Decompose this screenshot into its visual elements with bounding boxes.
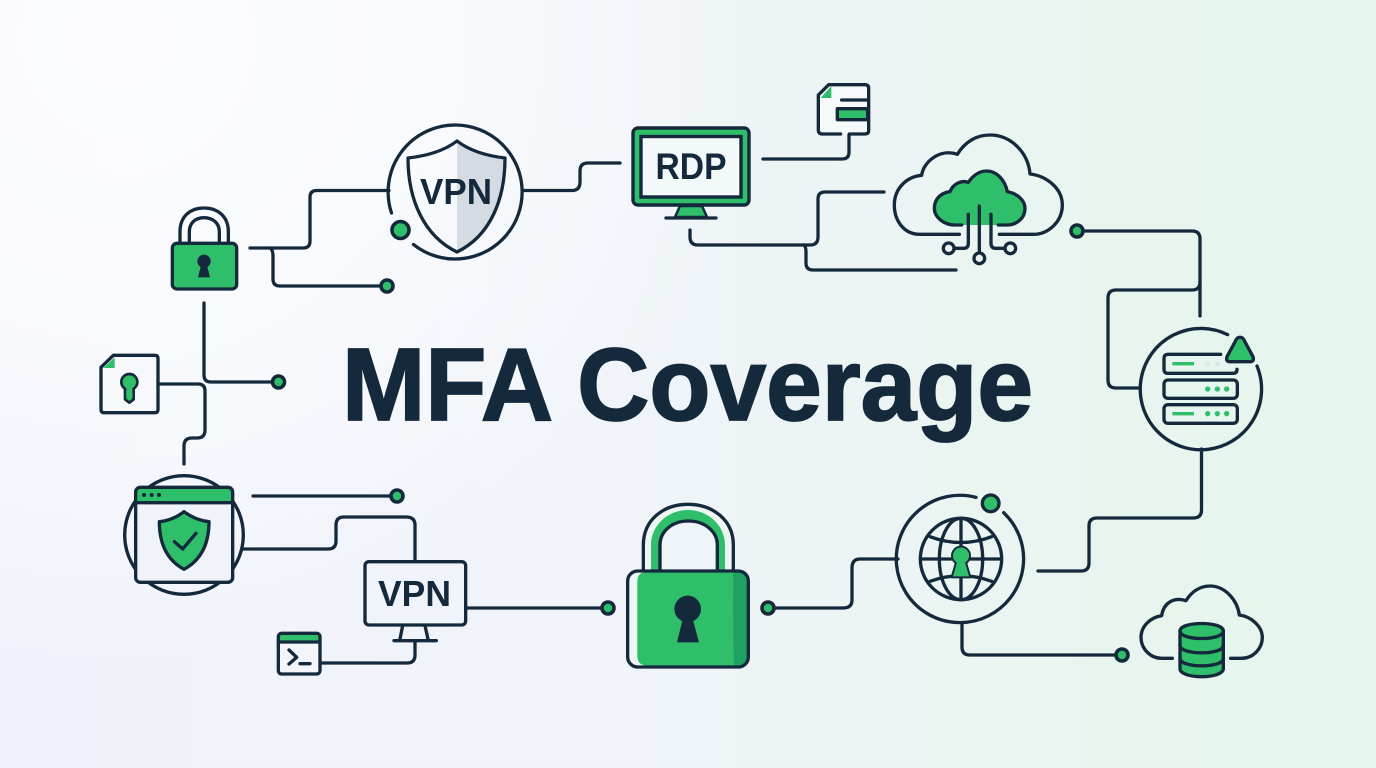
connector: VPN shield to RDP monitor: [524, 163, 620, 190]
connector: browser shield to VPN monitor: [243, 517, 415, 561]
connector: globe to cloud database: [962, 623, 1128, 661]
icon: large padlock: [628, 504, 748, 667]
connector: RDP monitor to document: [763, 134, 849, 159]
icon: RDP monitor: [633, 128, 749, 218]
icon: VPN monitor: [365, 562, 466, 641]
connector: browser shield to node: [253, 490, 403, 502]
icon: key file: [101, 355, 158, 413]
connector: VPN monitor to large lock: [467, 602, 614, 614]
icon: small padlock: [172, 208, 237, 289]
connector: small lock to VPN shield: [250, 190, 393, 292]
icon: terminal: [278, 633, 320, 674]
icon: globe with keyhole: [896, 495, 1024, 623]
icon: document: [818, 85, 869, 134]
connector: RDP monitor to cloud: [690, 192, 956, 270]
label: VPN: VPN: [378, 573, 451, 614]
connector: terminal to VPN monitor: [321, 641, 415, 663]
connector: small lock to title node: [204, 303, 284, 388]
icon: browser window with shield check: [125, 476, 243, 594]
icon: server rack with alert: [1140, 328, 1262, 450]
icon: VPN shield in circle: [388, 125, 522, 259]
connector: cloud to server: [1071, 225, 1200, 388]
title: MFA Coverage: [342, 327, 1033, 442]
connector: key file to browser shield: [158, 384, 205, 464]
connector: large lock to globe: [762, 559, 898, 614]
icon: cloud with circuit: [894, 135, 1062, 264]
icon: RDP monitor: RDP: [656, 146, 726, 187]
connector: server to globe: [1038, 449, 1202, 571]
icon: cloud with database: [1141, 586, 1262, 677]
icon: VPN shield in circle: VPN: [420, 171, 492, 212]
